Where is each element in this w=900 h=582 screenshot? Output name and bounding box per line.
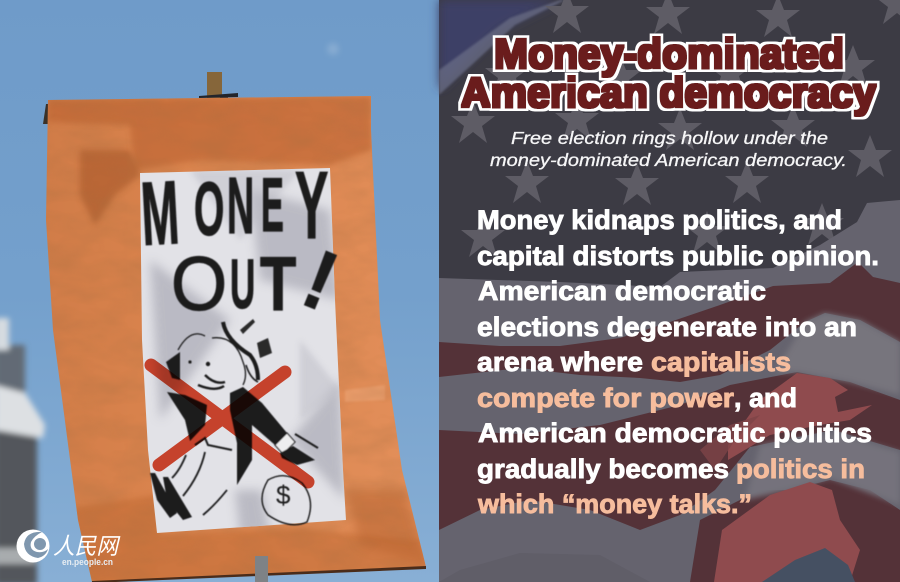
blurred building (0, 318, 45, 582)
maroon stripes (439, 262, 900, 382)
top hat (240, 319, 272, 358)
Monopoly man drawing: $ (276, 480, 291, 510)
body paragraph: capitalists (651, 347, 791, 377)
banner slogan: MONEY OUT!: O (171, 241, 227, 326)
body paragraph (477, 205, 879, 519)
logo url: en.people.cn (62, 557, 113, 567)
body paragraph: capital distorts public opinion. (477, 241, 879, 271)
banner slogan: MONEY OUT!: O (194, 167, 224, 251)
body paragraph: gradually becomes (477, 454, 729, 484)
logo: People's Daily Online (16, 530, 121, 567)
body paragraph: American democratic (478, 276, 766, 306)
red sunlit patches (728, 373, 872, 460)
subtitle (490, 128, 847, 170)
head outline (178, 334, 246, 385)
title (461, 30, 877, 116)
shoes (150, 473, 192, 520)
banner slogan: MONEY OUT!: Y (295, 153, 328, 259)
banner slogan: MONEY OUT!: E (261, 164, 284, 248)
body paragraph: Money kidnaps politics, and (477, 205, 842, 235)
body lines (172, 452, 227, 515)
money bag (262, 476, 311, 525)
face (198, 375, 225, 389)
flag background (439, 0, 900, 582)
bottom clip (255, 556, 268, 582)
Monopoly man drawing (150, 319, 318, 525)
panel: text on flag background (439, 0, 900, 582)
logo name: 人民网 (53, 533, 121, 559)
body paragraph: American democratic politics (478, 418, 872, 448)
title: Money-dominated (494, 30, 844, 77)
logo mark (16, 530, 50, 562)
light stripe highlights (775, 313, 900, 395)
banner slogan: MONEY OUT!: U (230, 245, 255, 323)
arms and leg (166, 352, 207, 441)
banner slogan: MONEY OUT! (139, 153, 350, 328)
subtitle: money-dominated American democracy. (490, 150, 847, 170)
body paragraph: arena where (477, 347, 643, 377)
banner slogan: MONEY OUT!: N (227, 161, 254, 251)
banner slogan: MONEY OUT!: T (260, 242, 296, 327)
grey stripes (439, 200, 900, 582)
body paragraph: which “money talks.” (477, 489, 752, 519)
panel: protest photo (0, 0, 440, 582)
banner pole (199, 72, 238, 128)
red X (151, 365, 308, 482)
white cloth panel (140, 168, 346, 535)
subtitle: Free election rings hollow under the (511, 128, 828, 148)
orange banner (40, 90, 440, 582)
body paragraph: , and (734, 383, 797, 413)
cloud (327, 43, 339, 55)
body paragraph: elections degenerate into an (477, 312, 857, 342)
title: American democracy (461, 69, 877, 116)
banner slogan: MONEY OUT!: M (139, 163, 181, 265)
body paragraph: politics in (736, 454, 865, 484)
cuff and hand (275, 433, 295, 454)
rod tip (43, 104, 50, 124)
stars (451, 0, 900, 257)
body paragraph: compete for power (477, 383, 735, 413)
banner slogan: MONEY OUT!: ! (291, 232, 350, 328)
